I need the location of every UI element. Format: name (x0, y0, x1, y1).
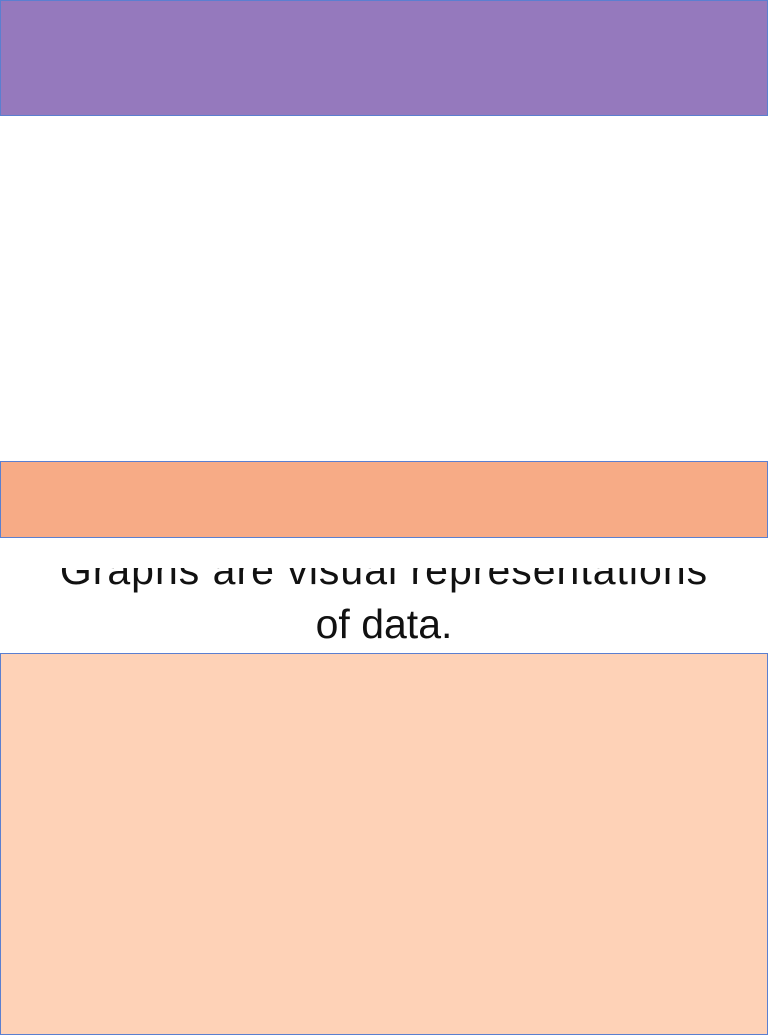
header band: purple (0, 0, 768, 116)
body text: graphs definition: of data. (316, 601, 452, 647)
panel: peach content box (0, 653, 768, 1035)
section band: orange (0, 461, 768, 538)
mask clipping text top (0, 539, 768, 568)
body text: graphs definition (60, 547, 708, 647)
body text: graphs definition: Graphs are visual representations (60, 547, 708, 593)
